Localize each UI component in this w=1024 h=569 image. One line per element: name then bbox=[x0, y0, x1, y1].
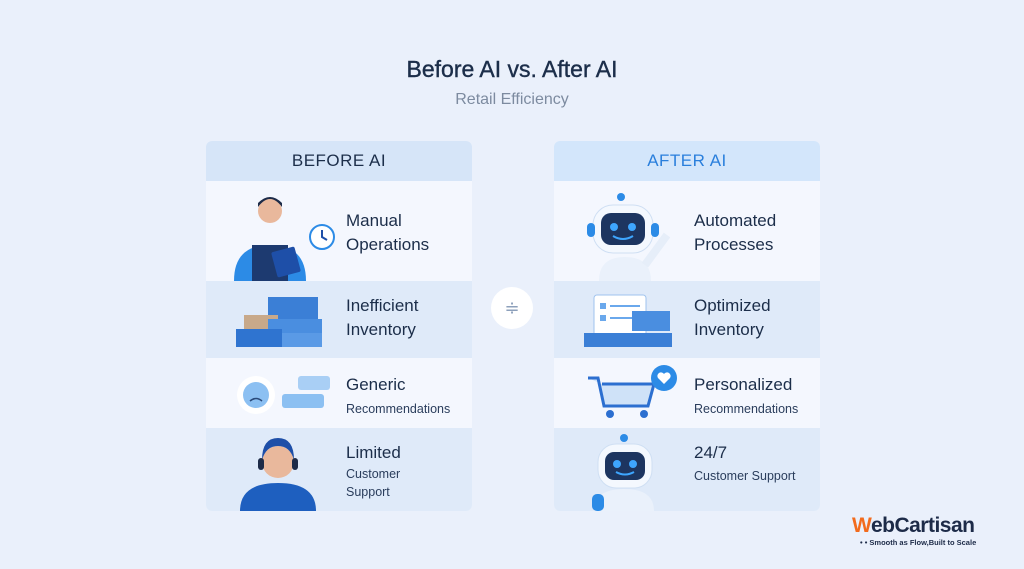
text: 24/7 customer support: 24/7 bbox=[694, 443, 727, 462]
text: limited customer support: Limited bbox=[346, 443, 401, 462]
row: limited support: Customer bbox=[346, 467, 400, 481]
text: personalized recommendations: Personalized bbox=[694, 375, 792, 394]
text: manual operations: Operations bbox=[346, 235, 429, 254]
icon: checklist and boxes bbox=[584, 294, 672, 347]
row: inefficient inventory bbox=[206, 281, 472, 358]
text: optimized inventory: Inventory bbox=[694, 320, 764, 339]
icon: sad face and chat bbox=[237, 376, 330, 414]
icon: support agent bbox=[240, 438, 316, 511]
icon: center comparison bbox=[491, 287, 533, 329]
row: generic recommendations bbox=[206, 358, 472, 428]
row: manual operations bbox=[206, 181, 472, 281]
logo: WebCartisan: WebCartisan bbox=[852, 514, 974, 537]
text: generic recommendations: Generic bbox=[346, 375, 406, 394]
heading: before bbox=[206, 141, 472, 181]
logo: WebCartisan: • • Smooth as Flow,Built to Scale bbox=[860, 538, 976, 547]
title: Before AI vs. After AI bbox=[407, 56, 617, 82]
icon: boxes bbox=[236, 297, 322, 347]
subtitle: Retail Efficiency bbox=[455, 91, 569, 108]
text: automated processes: Processes bbox=[694, 235, 773, 254]
heading: after: AFTER AI bbox=[647, 151, 727, 170]
text: inefficient inventory: Inefficient bbox=[346, 296, 418, 315]
row: personalized recommendations: Recommendations bbox=[694, 402, 798, 416]
icon: robot support bbox=[592, 434, 654, 511]
row: personalized recommendations bbox=[554, 358, 820, 428]
text: inefficient inventory: Inventory bbox=[346, 320, 416, 339]
heading: before: BEFORE AI bbox=[292, 151, 386, 170]
icon: cart with heart bbox=[588, 365, 677, 418]
icon: center comparison: ≑ bbox=[504, 298, 520, 318]
icon: robot waving bbox=[587, 193, 670, 281]
panel: after AI bbox=[554, 141, 820, 511]
logo: WebCartisan bbox=[852, 514, 976, 547]
text: manual operations bbox=[346, 211, 429, 254]
row: 24/7 support bbox=[554, 428, 820, 511]
icon: worker bbox=[234, 197, 335, 281]
row: limited support bbox=[206, 428, 472, 511]
panel: before AI bbox=[206, 141, 472, 511]
text: manual operations: Manual bbox=[346, 211, 402, 230]
text: inefficient inventory bbox=[346, 296, 418, 339]
text: optimized inventory: Optimized bbox=[694, 296, 771, 315]
text: automated processes: Automated bbox=[694, 211, 776, 230]
row: automated processes bbox=[554, 181, 820, 281]
row: limited support: Support bbox=[346, 485, 390, 499]
row: 24/7 support: Customer Support bbox=[694, 469, 795, 483]
text: automated processes bbox=[694, 211, 776, 254]
row: generic recommendations: Recommendations bbox=[346, 402, 450, 416]
row: optimized inventory bbox=[554, 281, 820, 358]
heading: after bbox=[554, 141, 820, 181]
text: optimized inventory bbox=[694, 296, 771, 339]
